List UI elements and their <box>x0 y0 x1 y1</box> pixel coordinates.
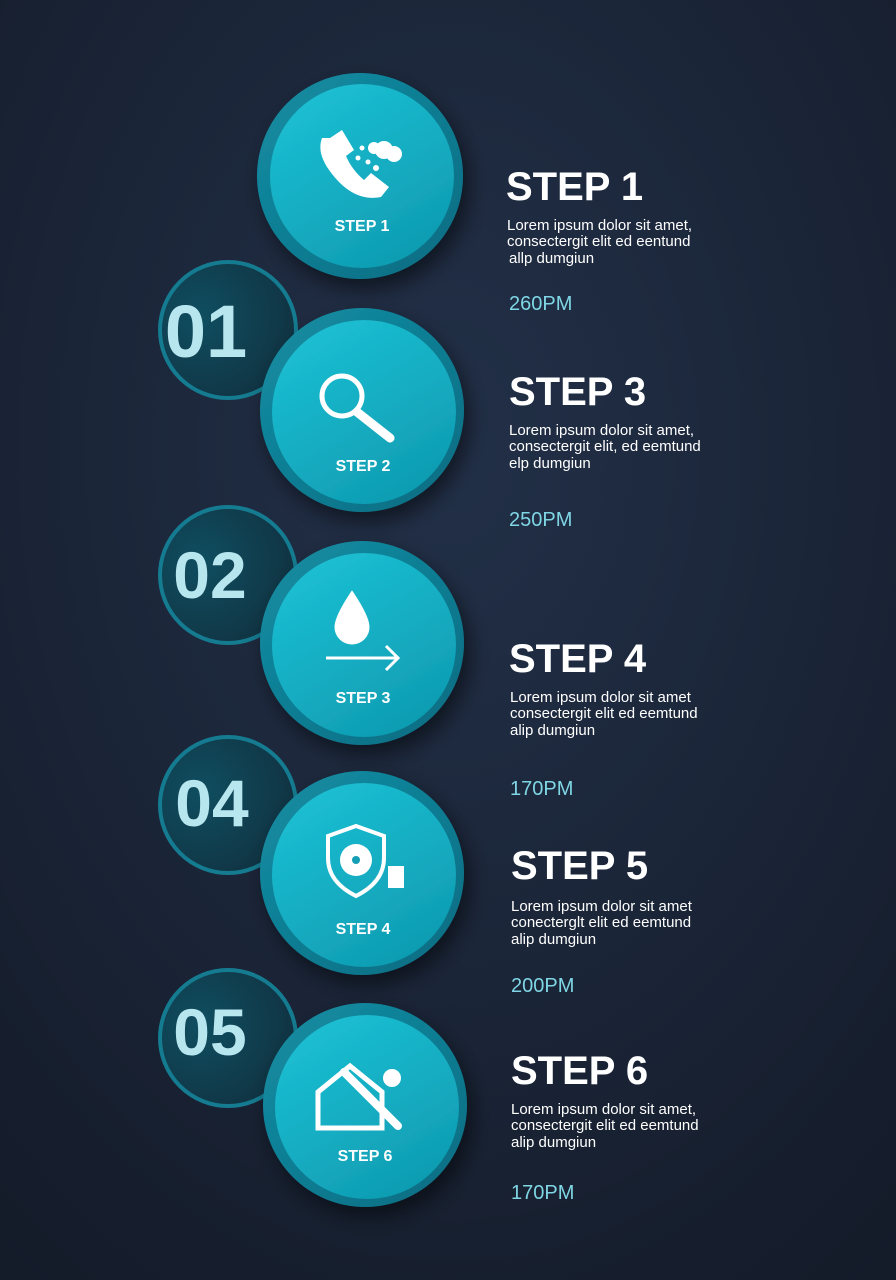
text block: step 1: allp dumgiun <box>509 250 594 267</box>
text block: step 4 <box>509 637 698 800</box>
text block: step 6 <box>511 1049 699 1204</box>
text block: step 1: consectergit elit ed eentund <box>507 233 690 250</box>
text block: step 6: STEP 6 <box>511 1049 648 1093</box>
text block: step 1: STEP 1 <box>506 165 643 209</box>
text block: step 5: 200PM <box>511 975 574 997</box>
circle: step 6 <box>263 1003 467 1207</box>
circle: step 3: STEP 3 <box>336 690 391 707</box>
text block: step 3: STEP 3 <box>509 370 646 414</box>
text block: step 4: 170PM <box>510 778 573 800</box>
text block: step 1 <box>506 165 692 315</box>
text block: step 4: Lorem ipsum dolor sit amet <box>510 689 692 706</box>
text block: step 5: STEP 5 <box>511 844 648 888</box>
circle: step 4 <box>260 771 464 975</box>
text block: step 3: consectergit elit, ed eemtund <box>509 438 701 455</box>
text block: step 6: alip dumgiun <box>511 1134 596 1151</box>
text block: step 3: Lorem ipsum dolor sit amet, <box>509 422 694 439</box>
text block: step 5: alip dumgiun <box>511 931 596 948</box>
number badge 01: 01 <box>165 290 247 373</box>
number badge 05 <box>160 970 296 1106</box>
icon: drop arrow <box>326 593 398 670</box>
icon: house wrench <box>318 1066 401 1128</box>
text block: step 1: Lorem ipsum dolor sit amet, <box>507 217 692 234</box>
circle: step 3 <box>260 541 464 745</box>
number badge 02 <box>160 507 296 643</box>
number badge 01 <box>160 262 296 398</box>
icon: phone <box>320 130 402 198</box>
text block: step 6: 170PM <box>511 1182 574 1204</box>
text block: step 5: conecterglt elit ed eemtund <box>511 914 691 931</box>
text block: step 3 <box>509 370 701 531</box>
icon: shield fan <box>328 826 404 896</box>
text block: step 3: 250PM <box>509 509 572 531</box>
icon: magnifier <box>322 376 390 438</box>
circle: step 6: STEP 6 <box>338 1148 393 1165</box>
circle: step 1: STEP 1 <box>335 218 390 235</box>
number badge 05: 05 <box>173 995 247 1069</box>
circle: step 2 <box>260 308 464 512</box>
text block: step 4: STEP 4 <box>509 637 647 681</box>
text block: step 1: 260PM <box>509 293 572 315</box>
number badge 02: 02 <box>173 538 247 612</box>
text block: step 6: Lorem ipsum dolor sit amet, <box>511 1101 696 1118</box>
number badge 04 <box>160 737 296 873</box>
text block: step 4: consectergit elit ed eemtund <box>510 705 698 722</box>
text block: step 6: consectergit elit ed eemtund <box>511 1117 699 1134</box>
number badge 04: 04 <box>175 766 249 840</box>
text block: step 4: alip dumgiun <box>510 722 595 739</box>
circle: step 4: STEP 4 <box>336 921 391 938</box>
circle: step 2: STEP 2 <box>336 458 391 475</box>
text block: step 5: Lorem ipsum dolor sit amet <box>511 898 693 915</box>
text block: step 5 <box>511 844 693 997</box>
text block: step 3: elp dumgiun <box>509 455 591 472</box>
circle: step 1 <box>257 73 463 279</box>
